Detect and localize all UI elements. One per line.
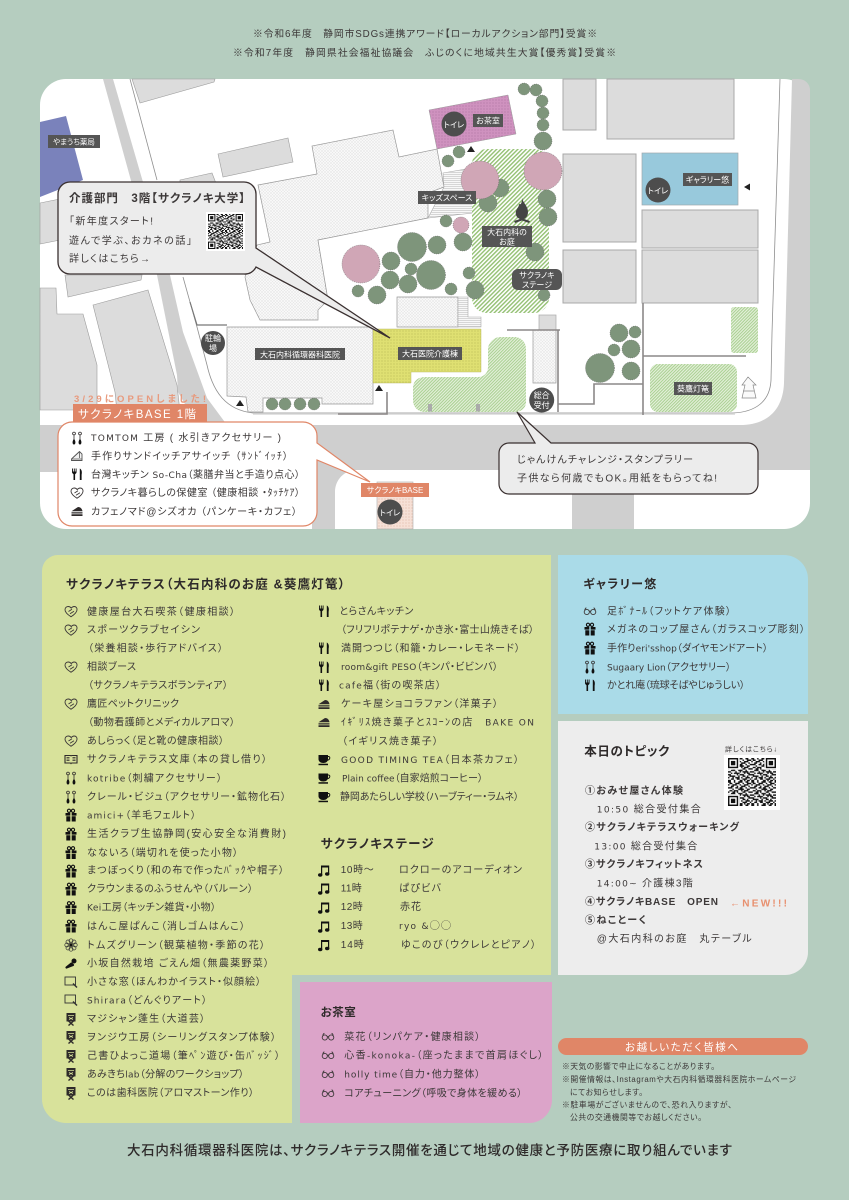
item: はんこ屋ぱんこ（消しゴムはんこ） — [87, 920, 245, 932]
heading: gallery: ギャラリー悠 — [583, 576, 656, 591]
item — [66, 900, 216, 914]
panel: today's topics — [558, 721, 808, 975]
item: スポーツクラブセイシン — [86, 623, 201, 636]
reception building: 受付 — [534, 400, 550, 410]
item: （サクラノキテラスボランティア） — [88, 680, 228, 692]
item: コアチューニング（呼吸で身体を緩める） — [344, 1086, 522, 1100]
slot: 10時～ — [341, 864, 374, 876]
building: gallery: トイレ — [648, 186, 669, 196]
item: あしらっく（足と靴の健康相談） — [87, 734, 224, 747]
right column list — [318, 606, 534, 803]
panel: Gallery Yu — [558, 555, 808, 714]
item: クラウンまるのふうせんや（バルーン） — [87, 883, 253, 895]
panel: tea room — [300, 982, 552, 1123]
item: クレール・ビジュ（アクセサリー・鉱物化石） — [87, 790, 286, 803]
icon: bike parking — [201, 331, 225, 355]
visitor notes — [562, 1061, 796, 1122]
heading: Sakuranoki Terrace: サクラノキテラス（大石内科のお庭 &葵鷹灯篭） — [66, 576, 345, 592]
slot — [318, 920, 451, 933]
slot: 赤花 — [400, 900, 421, 913]
label: garden: 大石内科の — [487, 227, 527, 237]
visitor notes: ※開催情報は、Instagramや大石内科循環器科医院ホームページ — [562, 1074, 796, 1084]
item: amici+（羊毛フェルト） — [87, 808, 196, 822]
item: 菜花（リンパケア・健康相談） — [344, 1030, 480, 1043]
item: （栄養相談・歩行アドバイス） — [88, 642, 223, 654]
shop: cafe nomad: カフェノマド@シズオカ （パンケーキ・カフェ） — [91, 505, 297, 518]
topic 1 — [585, 784, 701, 816]
topic 5: @大石内科のお庭 丸テーブル — [597, 932, 752, 945]
item: Plain coffee（自家焙煎コーヒー） — [342, 772, 483, 784]
callout: stamp rally — [499, 412, 758, 494]
lawn patches — [650, 307, 758, 412]
icon: campfire — [514, 198, 530, 223]
QR code — [206, 212, 245, 251]
slot: 11時 — [341, 882, 362, 894]
item: （フリフリポテナゲ・かき氷・富士山焼きそば） — [341, 623, 534, 636]
item: 足ﾎﾞﾅｰﾙ（フットケア体験） — [607, 604, 731, 618]
topic 5: ⑤ねことーく — [585, 914, 646, 926]
item: メガネのコップ屋さん（ガラスコップ彫刻） — [607, 624, 805, 636]
item: Kei工房（キッチン雑貨・小物） — [87, 900, 216, 914]
label: stage: サクラノキ — [519, 271, 555, 280]
award notices — [233, 27, 616, 59]
building: tea room: トイレ — [444, 120, 465, 130]
building: care wing: 大石医院介護棟 — [402, 348, 458, 358]
topic 1: 10:50 総合受付集合 — [597, 803, 701, 816]
item: まつぼっくり（和の布で作ったﾊﾞｯｸや帽子） — [87, 864, 284, 876]
item: マジシャン蓬生（大道芸） — [87, 1012, 205, 1025]
item: kotribe（刺繍アクセサリー） — [87, 772, 222, 784]
neighbouring buildings — [40, 79, 758, 412]
visitor notes: にてお知らせします。 — [570, 1087, 643, 1097]
item: holly time（自力・他力整体） — [344, 1068, 480, 1080]
item: このは歯科医院（アロマストーン作り） — [87, 1086, 254, 1099]
reception building — [338, 303, 746, 415]
slot — [318, 900, 421, 914]
item: 生活クラブ生協静岡(安心安全な消費財) — [87, 827, 286, 840]
award notices: ※令和6年度 静岡市SDGs連携アワード【ローカルアクション部門】受賞※ — [253, 27, 597, 40]
topic 4 — [585, 896, 787, 910]
slot: 14時 — [341, 939, 364, 951]
building: hospital upper wing — [245, 130, 444, 320]
kids space strip — [428, 168, 482, 218]
reception building: 総合 — [534, 390, 550, 400]
item: 健康屋台大石喫茶（健康相談） — [87, 605, 235, 618]
lawn patches: 葵鷹灯篭 — [677, 384, 709, 394]
building: BASE — [377, 482, 413, 529]
item: Shirara（どんぐりアート） — [87, 994, 207, 1006]
topic 5 — [585, 914, 752, 945]
callout: stamp rally: 子供なら何歳でもOK。用紙をもらってね! — [517, 472, 717, 484]
item: サクラノキテラス文庫（本の貸し借り） — [87, 752, 267, 766]
shop: So-Cha: 台灣キッチン So-Cha（薬膳弁当と手造り点心） — [91, 468, 300, 481]
topic 4: ←NEW!!! — [730, 898, 787, 910]
item — [65, 660, 228, 692]
item — [319, 606, 534, 636]
label: BASE — [361, 483, 429, 497]
label: garden: お庭 — [499, 236, 515, 246]
slot: ゆこのび（ウクレレとピアノ） — [401, 939, 536, 951]
topic 3: ③サクラノキフィットネス — [585, 859, 703, 871]
item: あみきちlab（分解のワークショップ） — [87, 1068, 244, 1080]
item: cafe福（街の喫茶店） — [339, 678, 441, 692]
item: GOOD TIMING TEA（日本茶カフェ） — [341, 753, 519, 766]
item: 静岡あたらしい学校（ハーブティー・ラムネ） — [340, 790, 519, 803]
item: とらさんキッチン — [339, 606, 414, 618]
notice banner: お越しいただく皆様へ — [625, 1040, 738, 1054]
item: 己書ひよっこ道場（筆ﾍﾟﾝ遊び・缶ﾊﾞｯｼﾞ） — [87, 1049, 280, 1062]
slot: ぱぴビバ — [399, 882, 441, 894]
visitor notes: 公共の交通機関等でお越しください。 — [570, 1112, 702, 1122]
shop: sandwich: 手作りサンドイッチアサイッチ （ｻﾝﾄﾞｲｯﾁ） — [91, 450, 288, 462]
slot: 13時 — [341, 920, 363, 932]
shop: health room: サクラノキ暮らしの保健室 （健康相談 ・ﾀｯﾁｹｱ） — [91, 486, 300, 499]
item — [65, 697, 235, 728]
site boundary line — [130, 79, 780, 413]
icon: bike parking: 場 — [209, 343, 217, 353]
QR caption and code — [724, 744, 780, 810]
item: 手作りeri'sshop（ダイヤモンドアート） — [607, 642, 768, 654]
heading: tea room: お茶室 — [321, 1005, 356, 1019]
notice banner — [558, 1038, 808, 1055]
building: pharmacy — [40, 116, 100, 197]
item: 小さな窓（ほんわかイラスト・似顔絵） — [87, 975, 261, 988]
building: lower dotted block — [397, 297, 481, 327]
L-shaped lawn — [413, 337, 526, 412]
shop: TOMTOM: TOMTOM 工房 ( 水引きアクセサリー ) — [90, 432, 281, 444]
building: gallery — [642, 153, 738, 205]
entrance markers — [236, 146, 750, 406]
slot — [318, 863, 523, 877]
topic 1: ①おみせ屋さん体験 — [585, 784, 683, 797]
item: Sugaary Lion（アクセサリー） — [607, 662, 731, 674]
item: 満開つつじ（和籠・カレー・レモネード） — [341, 642, 520, 654]
heading: topics: 本日のトピック — [584, 744, 670, 758]
visitor notes: ※天気の影響で中止になることがあります。 — [562, 1061, 715, 1071]
callout: care department: 「新年度スタート! — [69, 214, 153, 228]
heading: stage: サクラノキステージ — [321, 837, 434, 851]
topic 3 — [585, 859, 703, 889]
callout: stamp rally: じゃんけんチャレンジ・スタンプラリー — [517, 454, 693, 466]
garden lawn — [472, 149, 549, 313]
slot — [318, 939, 536, 951]
building: pharmacy: やまうち薬局 — [53, 136, 95, 146]
label: stage: ステージ — [522, 280, 552, 290]
topic 2: ②サクラノキテラスウォーキング — [585, 821, 739, 834]
slot — [318, 882, 441, 895]
callout: BASE opening: 3/29にOPENしました! — [74, 394, 206, 405]
item: 相談ブース — [87, 660, 136, 673]
label: kids space — [418, 191, 476, 204]
item: ｲｷﾞﾘｽ焼き菓子とｽｺｰﾝの店 BAKE ON — [341, 716, 534, 728]
building: gallery: ギャラリー悠 — [686, 174, 729, 184]
panel: Sakuranoki Terrace — [42, 555, 551, 1123]
building: care wing — [373, 329, 481, 383]
topic 2: 13:00 総合受付集合 — [594, 839, 697, 852]
item: ヲンジウ工房（シーリングスタンプ体験） — [87, 1030, 276, 1044]
slot: ロクローのアコーディオン — [399, 863, 523, 876]
callout: BASE opening: サクラノキBASE 1階 — [78, 408, 196, 421]
item: 鷹匠ペットクリニック — [87, 697, 179, 710]
item: トムズグリーン（観葉植物・季節の花） — [87, 938, 265, 952]
item: （動物看護師とメディカルアロマ） — [88, 716, 235, 728]
item: かとれ庵（琉球そばやじゅうしい） — [607, 678, 745, 692]
trees — [266, 83, 641, 410]
stage schedule — [318, 863, 536, 951]
topic 3: 14:00~ 介護棟3階 — [597, 876, 693, 889]
item: （イギリス焼き菓子） — [342, 736, 438, 748]
topic 4: ④サクラノキBASE OPEN — [585, 896, 718, 908]
item: 小坂自然栽培 ごえん畑（無農薬野菜） — [87, 956, 269, 970]
callout: care department: 詳しくはこちら→ — [69, 252, 150, 265]
building: tea room — [429, 95, 516, 149]
slot: 12時 — [341, 901, 363, 913]
item: 心香-konoka-（座ったままで首肩ほぐし） — [344, 1048, 543, 1062]
label: garden — [482, 226, 532, 247]
topic 2 — [585, 821, 739, 852]
item — [65, 623, 223, 654]
item — [318, 716, 534, 748]
building: BASE: トイレ — [380, 508, 401, 518]
footer statement: 大石内科循環器科医院は、サクラノキテラス開催を通じて地域の健康と予防医療に取り組んでいます — [127, 1142, 732, 1158]
callout: care department — [58, 182, 390, 338]
label: BASE: サクラノキBASE — [367, 486, 423, 495]
icon: stone lantern — [742, 377, 756, 398]
callout: BASE opening — [58, 394, 370, 526]
label: kids space: キッズスペース — [421, 192, 473, 202]
panel: site map — [40, 79, 810, 529]
item: なないろ（端切れを使った小物） — [87, 846, 238, 859]
callout: care department: 介護部門 3階【サクラノキ大学】 — [69, 191, 245, 205]
item: room&gift PESO（キンパ・ビビンバ） — [341, 661, 498, 673]
visitor notes: ※駐車場がございませんので、恐れ入りますが、 — [562, 1099, 732, 1109]
label: stage — [512, 269, 562, 290]
courtyard white — [318, 218, 470, 300]
item: ケーキ屋ショコラファン（洋菓子） — [341, 697, 498, 710]
callout: care department: 遊んで学ぶ、おカネの話」 — [69, 234, 192, 247]
left column list — [65, 605, 286, 1100]
building: main hospital — [227, 327, 373, 412]
award notices: ※令和7年度 静岡県社会福祉協議会 ふじのくに地域共生大賞【優秀賞】受賞※ — [233, 46, 616, 59]
building: main hospital: 大石内科循環器科医院 — [260, 350, 340, 360]
building: tea room: お茶室 — [476, 116, 500, 126]
QR caption and code: 詳しくはこちら↓ — [725, 744, 777, 754]
icon: bike parking: 駐輪 — [205, 333, 221, 343]
roads — [40, 79, 810, 529]
slot: ryo &◯◯ — [399, 920, 451, 932]
